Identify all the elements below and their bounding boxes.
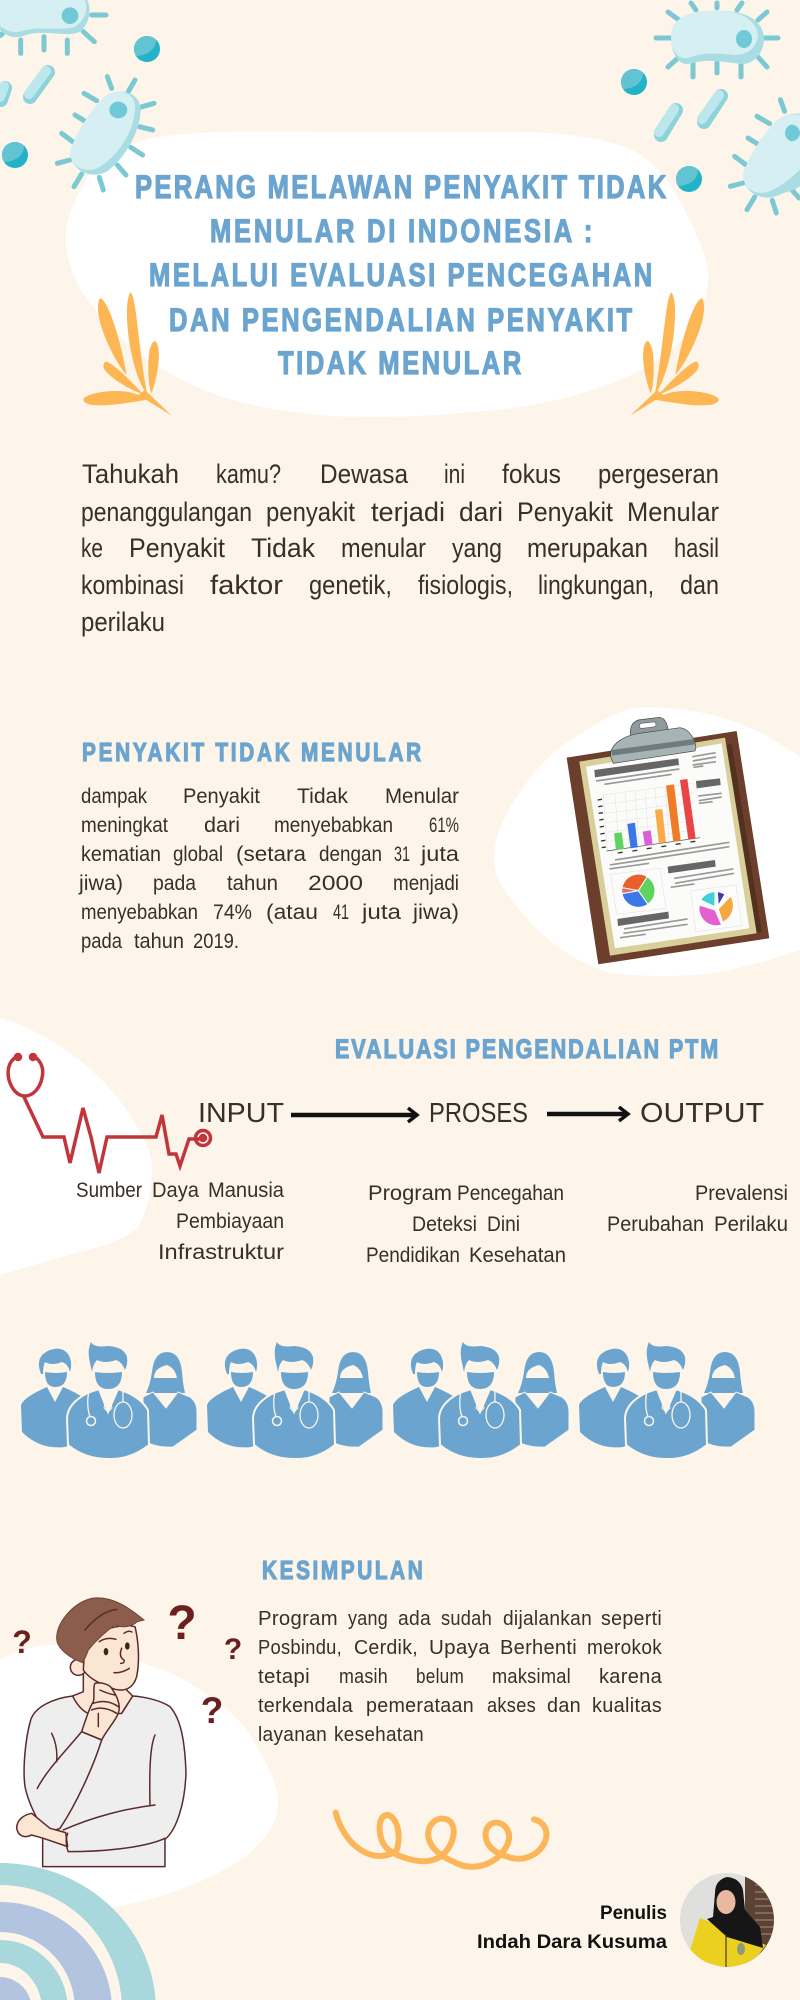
intro paragraph: Dewasa	[320, 459, 409, 489]
text block: kesimpulan: layanan	[258, 1724, 327, 1746]
text block: output list: Perilaku	[714, 1213, 788, 1236]
text block: dampak penyakit tidak menular: tahun	[134, 930, 184, 953]
pie chart left	[611, 868, 666, 914]
intro paragraph: kombinasi	[81, 570, 184, 600]
icon: question marks: ?	[167, 1597, 197, 1650]
intro paragraph: hasil	[674, 533, 719, 563]
label: proses: PROSES	[429, 1097, 528, 1128]
text block: kesimpulan: belum	[416, 1666, 464, 1688]
icon: medical team 2	[207, 1342, 383, 1459]
arrow: input to proses	[291, 1108, 417, 1122]
panel: white blob behind clipboard	[494, 707, 800, 976]
text block: kesimpulan: Posbindu,	[258, 1637, 342, 1659]
text block: dampak penyakit tidak menular: kematian	[81, 843, 161, 866]
text block: kesimpulan: terkendala	[258, 1695, 354, 1717]
text block: kesimpulan: Upaya	[429, 1637, 491, 1659]
heading: evaluasi pengendalian PTM: EVALUASI PENGENDALIAN PTM	[335, 1035, 718, 1065]
text block: kesimpulan: karena	[599, 1666, 663, 1688]
text block: dampak penyakit tidak menular: 61%	[429, 814, 459, 837]
icon: bacterium left tilted	[57, 77, 154, 190]
text block: input list: Manusia	[208, 1179, 284, 1202]
text block: kesimpulan: seperti	[601, 1608, 662, 1630]
title: DAN PENGENDALIAN PENYAKIT	[169, 303, 632, 339]
icon: question marks: ?	[224, 1633, 242, 1666]
text block: dampak penyakit tidak menular: meningkat	[81, 814, 168, 837]
text block: dampak penyakit tidak menular: juta	[361, 901, 401, 924]
face	[83, 1626, 138, 1690]
icon: clipboard with report	[567, 717, 769, 964]
icon: bacterium top right	[656, 3, 778, 77]
bar chart	[598, 779, 700, 853]
intro paragraph: Tahukah	[82, 459, 179, 489]
intro paragraph: ini	[444, 459, 465, 489]
icon: orange plant right	[630, 293, 719, 416]
text block: proses list: Pencegahan	[457, 1182, 564, 1205]
intro paragraph: perilaku	[81, 607, 165, 637]
report lines	[594, 758, 679, 777]
intro paragraph: ke	[81, 533, 103, 563]
white blob behind title	[66, 131, 708, 417]
intro paragraph: yang	[452, 533, 502, 563]
label: output: OUTPUT	[640, 1097, 764, 1128]
text block: proses list: Dini	[487, 1213, 520, 1236]
text block: kesimpulan: sudah	[441, 1608, 492, 1630]
text block: dampak penyakit tidak menular: global	[173, 843, 223, 866]
intro paragraph	[81, 459, 719, 637]
title	[135, 170, 666, 382]
text block: dampak penyakit tidak menular: pada	[153, 872, 196, 895]
decorative rainbow	[0, 1863, 156, 2000]
title: TIDAK MENULAR	[278, 346, 521, 382]
heading: kesimpulan: KESIMPULAN	[262, 1556, 423, 1585]
icon: stethoscope heartbeat	[8, 1054, 210, 1173]
text block: dampak penyakit tidak menular: Tidak	[297, 785, 348, 808]
text block: kesimpulan: kesehatan	[334, 1724, 424, 1746]
text block: kesimpulan: Program	[258, 1608, 338, 1630]
text block: dampak penyakit tidak menular: 2000	[308, 872, 363, 895]
text block: dampak penyakit tidak menular: 74%	[213, 901, 252, 924]
facial features	[85, 1609, 132, 1673]
text block: input list	[76, 1179, 284, 1264]
icon: orange squiggle	[336, 1813, 546, 1867]
icon: question marks: ?	[201, 1690, 223, 1731]
panel: white blob behind thinking man	[0, 1645, 278, 1925]
intro paragraph: Menular	[627, 497, 719, 527]
text block: dampak penyakit tidak menular: juta	[420, 843, 459, 866]
text block: kesimpulan: merokok	[587, 1637, 663, 1659]
text block: kesimpulan: kualitas	[592, 1695, 662, 1717]
text block: dampak penyakit tidak menular: (setara	[236, 843, 306, 866]
text block: dampak penyakit tidak menular	[78, 785, 459, 953]
arrow: proses to output	[547, 1107, 628, 1121]
intro paragraph: faktor	[210, 570, 283, 600]
text block: input list: Pembiayaan	[176, 1210, 284, 1233]
icon: bacterium top left	[0, 0, 106, 53]
icon: medical team 4	[579, 1342, 755, 1459]
text block: dampak penyakit tidak menular: tahun	[227, 872, 278, 895]
icon: spores and capsules	[0, 36, 721, 192]
neck	[73, 1670, 133, 1714]
intro paragraph: menular	[341, 533, 426, 563]
title: PERANG MELAWAN PENYAKIT TIDAK	[135, 170, 666, 206]
intro paragraph: terjadi	[371, 497, 445, 527]
intro paragraph: pergeseran	[598, 459, 719, 489]
icon: bacterium right edge	[730, 100, 800, 213]
text block: kesimpulan: yang	[348, 1608, 388, 1630]
text block: kesimpulan: tetapi	[258, 1666, 310, 1688]
text: nama penulis: Indah Dara Kusuma	[477, 1932, 667, 1953]
text block: kesimpulan: masih	[339, 1666, 388, 1688]
intro paragraph: dari	[459, 497, 503, 527]
panel: white blob behind stethoscope	[0, 1018, 152, 1275]
text block: dampak penyakit tidak menular: 2019.	[193, 930, 239, 953]
clip	[611, 717, 696, 763]
intro paragraph: Tidak	[251, 533, 315, 563]
text block: dampak penyakit tidak menular: Menular	[385, 785, 459, 808]
text block: input list: Sumber	[76, 1179, 142, 1202]
intro paragraph: Penyakit	[129, 533, 225, 563]
intro paragraph: penanggulangan	[81, 497, 252, 527]
text block: input list: Infrastruktur	[158, 1241, 284, 1264]
text block: dampak penyakit tidak menular: Penyakit	[183, 785, 260, 808]
intro paragraph: penyakit	[266, 497, 355, 527]
text block: kesimpulan: pemerataan	[366, 1695, 474, 1717]
text block: proses list: Pendidikan	[366, 1244, 460, 1267]
text block: dampak penyakit tidak menular: dengan	[319, 843, 382, 866]
text block: proses list: Deteksi	[412, 1213, 477, 1236]
icon: medical team 1	[21, 1342, 197, 1459]
intro paragraph: fokus	[502, 459, 561, 489]
text block: kesimpulan: maksimal	[492, 1666, 571, 1688]
text block: kesimpulan: akses	[487, 1695, 536, 1717]
text block: dampak penyakit tidak menular: jiwa)	[78, 872, 123, 895]
text block: output list: Prevalensi	[695, 1182, 788, 1205]
icon: question marks	[12, 1597, 242, 1731]
text block: dampak penyakit tidak menular: menyebabkan	[274, 814, 393, 837]
text block: kesimpulan: Cerdik,	[354, 1637, 418, 1659]
intro paragraph: merupakan	[527, 533, 648, 563]
text block: dampak penyakit tidak menular: jiwa)	[412, 901, 459, 924]
text block: kesimpulan: dan	[547, 1695, 581, 1717]
text block: kesimpulan: Berhenti	[500, 1637, 577, 1659]
sweater	[24, 1696, 186, 1867]
icon: medical team 3	[393, 1342, 569, 1459]
text block: dampak penyakit tidak menular: pada	[81, 930, 122, 953]
intro paragraph: lingkungan,	[538, 570, 654, 600]
heading: penyakit tidak menular: PENYAKIT TIDAK MENULAR	[82, 738, 421, 767]
icon: author portrait	[680, 1873, 775, 1968]
pie chart right	[691, 885, 742, 932]
intro paragraph: kamu?	[216, 459, 281, 489]
text block: proses list: Program	[368, 1182, 452, 1205]
text block: kesimpulan: dijalankan	[503, 1608, 592, 1630]
hair	[57, 1598, 144, 1663]
text block: input list: Daya	[152, 1179, 199, 1202]
ear	[70, 1659, 86, 1675]
text block: dampak penyakit tidak menular: menyebabkan	[81, 901, 198, 924]
lower hand	[17, 1813, 68, 1847]
intro paragraph: fisiologis,	[418, 570, 513, 600]
text block: kesimpulan: ada	[398, 1608, 432, 1630]
intro paragraph: genetik,	[309, 570, 392, 600]
text block: dampak penyakit tidak menular: menjadi	[393, 872, 459, 895]
icon: orange plant left	[83, 293, 172, 416]
label: input: INPUT	[198, 1097, 284, 1128]
title: MENULAR DI INDONESIA :	[210, 214, 592, 250]
text block: dampak penyakit tidak menular: (atau	[266, 901, 318, 924]
text block: dampak penyakit tidak menular: dampak	[81, 785, 147, 808]
text block: output list: Perubahan	[607, 1213, 704, 1236]
text block: dampak penyakit tidak menular: 41	[333, 901, 349, 924]
text block: proses list	[366, 1182, 566, 1267]
raised hand and arm lines	[37, 1683, 165, 1852]
intro paragraph: Penyakit	[517, 497, 613, 527]
text: penulis: Penulis	[600, 1903, 667, 1924]
text block: dampak penyakit tidak menular: dari	[204, 814, 240, 837]
text block: dampak penyakit tidak menular: 31	[394, 843, 410, 866]
text block: output list	[607, 1182, 788, 1236]
intro paragraph: dan	[680, 570, 719, 600]
title: MELALUI EVALUASI PENCEGAHAN	[149, 258, 652, 294]
icon: thinking man	[17, 1598, 186, 1867]
text block: proses list: Kesehatan	[469, 1244, 566, 1267]
icon: question marks: ?	[12, 1624, 32, 1660]
text block: kesimpulan	[258, 1608, 663, 1746]
